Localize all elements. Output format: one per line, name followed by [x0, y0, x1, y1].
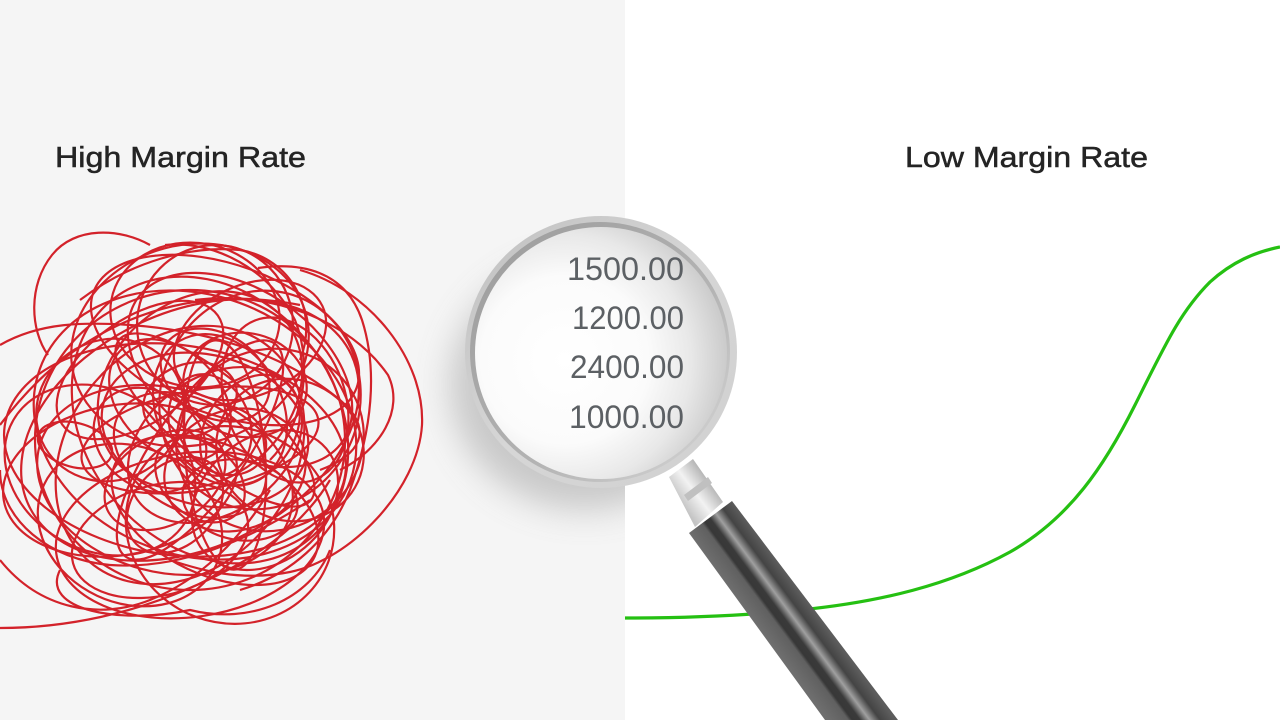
number 1500.00: 1500.00 [567, 251, 684, 287]
magnified numbers [567, 251, 684, 435]
heading: high margin rate: High Margin Rate [55, 142, 306, 174]
magnifier rim [465, 216, 737, 488]
panel: low margin background [625, 0, 1280, 720]
number 2400.00: 2400.00 [570, 349, 684, 385]
panel: high margin background [0, 0, 625, 720]
magnifier shadow [436, 284, 625, 524]
magnifier inner rim [470, 222, 730, 482]
magnifier handle [689, 501, 898, 720]
chart: tangled red line [0, 217, 422, 653]
number 1000.00: 1000.00 [569, 399, 684, 435]
magnifier neck [669, 459, 723, 527]
icon: magnifying glass [450, 216, 898, 720]
magnifier lens [475, 227, 727, 479]
number 1200.00: 1200.00 [572, 300, 684, 336]
chart: smooth green line [625, 247, 1280, 618]
heading: low margin rate: Low Margin Rate [905, 142, 1148, 174]
